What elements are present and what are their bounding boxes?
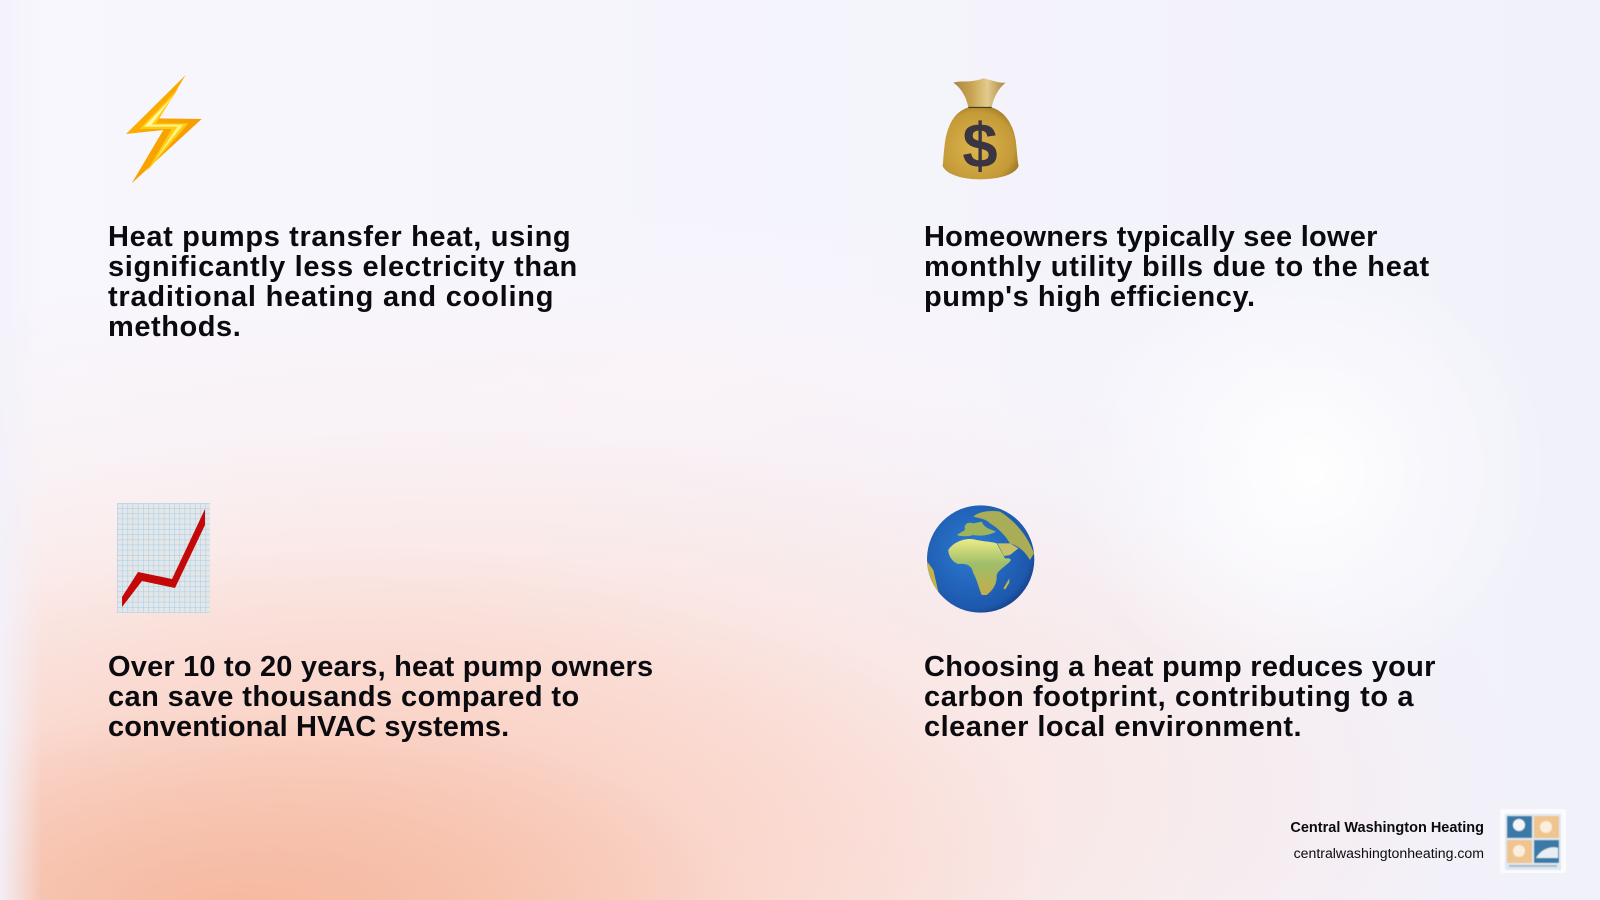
text: utility bills: monthly utility bills due to the heat xyxy=(924,251,1430,283)
text: electricity: methods. xyxy=(108,311,241,343)
text: environment xyxy=(924,651,1436,743)
text: utility bills xyxy=(924,221,1430,313)
text: long-term savings: Over 10 to 20 years, heat pump owners xyxy=(108,651,653,683)
text: long-term savings xyxy=(108,651,653,743)
text: electricity: traditional heating and cooling xyxy=(108,281,554,313)
brand name: Central Washington Heating xyxy=(1290,820,1484,836)
text: utility bills: pump's high efficiency. xyxy=(924,281,1256,313)
text: electricity: Heat pumps transfer heat, using xyxy=(108,221,571,253)
text: environment: Choosing a heat pump reduces your xyxy=(924,651,1436,683)
text: electricity xyxy=(108,221,578,343)
text: long-term savings: conventional HVAC systems. xyxy=(108,711,509,743)
text: long-term savings: can save thousands compared to xyxy=(108,681,580,713)
icon: money bag: $ xyxy=(962,111,998,181)
icon: earth globe xyxy=(927,505,1034,613)
brand website: centralwashingtonheating.com xyxy=(1294,845,1484,861)
text: electricity: significantly less electricity than xyxy=(108,251,578,283)
text: utility bills: Homeowners typically see lower xyxy=(924,221,1378,253)
text: environment: cleaner local environment. xyxy=(924,711,1302,743)
text: environment: carbon footprint, contributing to a xyxy=(924,681,1414,713)
